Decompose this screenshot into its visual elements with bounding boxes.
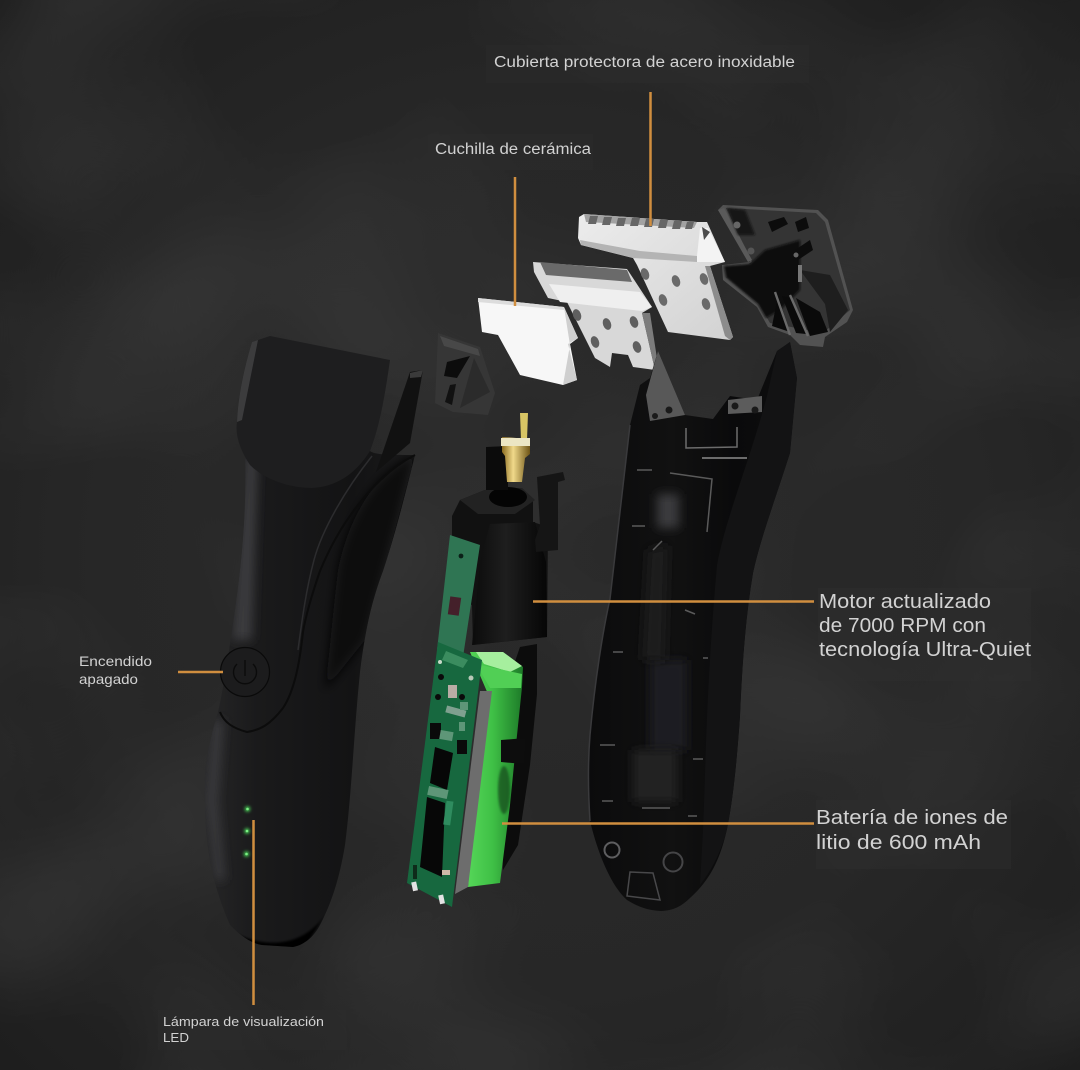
exploded part: small black bracket: [435, 333, 495, 415]
label: LED lamp: LED: [163, 1030, 189, 1045]
label: motor: de 7000 RPM con: [819, 615, 986, 637]
clipper front body: [205, 336, 423, 955]
label: battery: [816, 800, 1011, 869]
exploded part: head cover: [718, 205, 853, 347]
internal assembly: upper circuit board: [437, 535, 480, 657]
label: stainless steel cover: [486, 45, 809, 83]
exploded part: toothed steel blade: [533, 262, 658, 370]
leader line: motor: [533, 600, 814, 603]
label: ceramic blade: [428, 134, 593, 170]
label: stainless steel cover: Cubierta protectora de acero inoxidable: [494, 54, 795, 71]
internal assembly: lower circuit board: [407, 642, 482, 907]
label: motor: Motor actualizado: [819, 591, 991, 613]
label: battery: Batería de iones de: [816, 807, 1008, 829]
internal assembly: lithium battery: [468, 652, 526, 887]
internal assembly: grey insulator strip: [455, 691, 492, 894]
exploded part: stainless steel protective cover: [578, 214, 733, 340]
label: motor: [818, 588, 1031, 681]
exploded part: ceramic blade: [478, 298, 578, 385]
label: power button: apagado: [79, 671, 138, 687]
leader line: ceramic blade: [514, 177, 516, 306]
label: power button: [79, 653, 152, 687]
label: battery: litio de 600 mAh: [816, 832, 981, 854]
leader line: power button: [178, 671, 223, 673]
icon: power button: [220, 648, 270, 696]
label: power button: Encendido: [79, 653, 152, 669]
leader line: battery: [502, 822, 814, 825]
internal assembly: battery frame: [500, 644, 537, 870]
label: ceramic blade: Cuchilla de cerámica: [435, 141, 591, 158]
back shell: [588, 342, 797, 911]
label: LED lamp: Lámpara de visualización: [163, 1014, 324, 1029]
LED indicator lights: [244, 806, 250, 857]
leader line: stainless steel cover: [649, 92, 652, 226]
label: motor: tecnología Ultra-Quiet: [819, 639, 1031, 661]
leader line: LED lamp: [252, 820, 255, 1005]
internal assembly: motor: [452, 446, 565, 645]
internal assembly: brass shaft: [501, 413, 530, 482]
label: LED lamp: [158, 1010, 346, 1050]
